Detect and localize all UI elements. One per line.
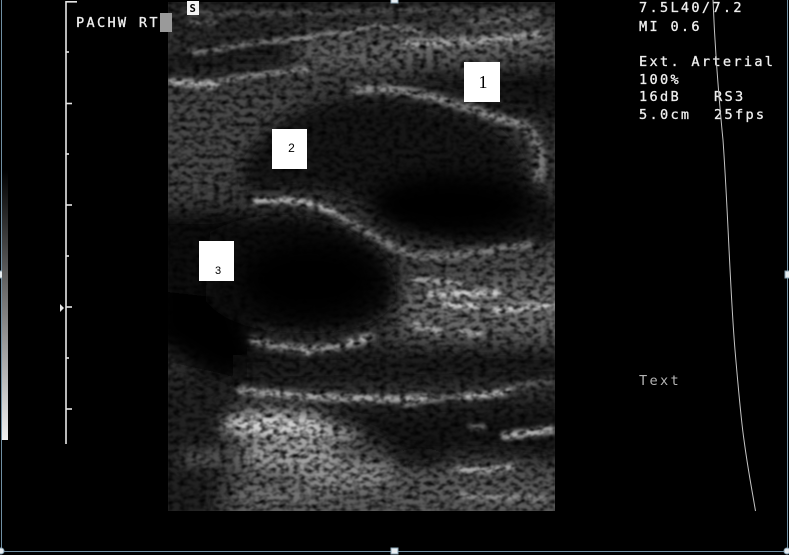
settings text: 25fps	[714, 107, 766, 123]
cursor block	[160, 13, 172, 32]
lumen 3: internal artery	[205, 215, 397, 333]
settings text: 16dB	[639, 89, 681, 105]
speckle texture	[168, 2, 555, 511]
settings text: 5.0cm	[639, 107, 691, 123]
label 1	[464, 62, 500, 102]
probe orientation marker: S	[190, 3, 196, 15]
curve trace	[713, 0, 756, 511]
label 3	[199, 241, 234, 281]
lumen 2: external artery	[243, 98, 560, 244]
label 1: 1	[478, 72, 488, 92]
settings text: 100%	[639, 72, 681, 88]
tissue echoes	[168, 10, 552, 500]
ultrasound image: carotid bifurcation	[168, 2, 555, 511]
gray scale bar	[2, 170, 8, 440]
label 3: 3	[215, 265, 221, 277]
label 2	[272, 129, 307, 169]
settings text: MI 0.6	[639, 19, 702, 35]
patient label: PACHW RT	[76, 15, 160, 31]
label 2: 2	[288, 141, 295, 155]
settings text: Ext. Arterial	[639, 54, 775, 70]
text annotation: Text	[639, 373, 681, 389]
settings text: RS3	[714, 89, 745, 105]
probe orientation marker	[187, 1, 199, 15]
settings text	[639, 0, 775, 123]
depth ruler	[66, 2, 77, 444]
settings text: 7.5L40/7.2	[639, 0, 744, 16]
focus marker	[60, 304, 64, 312]
